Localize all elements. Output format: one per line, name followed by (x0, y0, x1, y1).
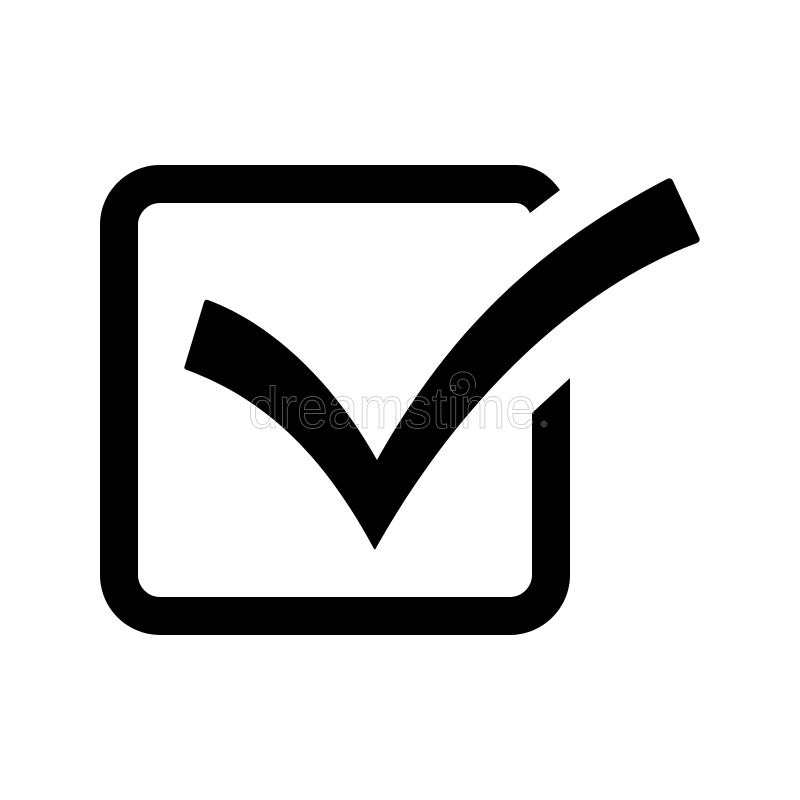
watermark registered mark: ® (541, 420, 547, 429)
watermark spiral (450, 372, 476, 395)
watermark (248, 372, 547, 441)
icon: check mark (184, 178, 700, 550)
icon: rounded square box outline (100, 165, 570, 635)
watermark text: dreamstime (248, 376, 536, 441)
